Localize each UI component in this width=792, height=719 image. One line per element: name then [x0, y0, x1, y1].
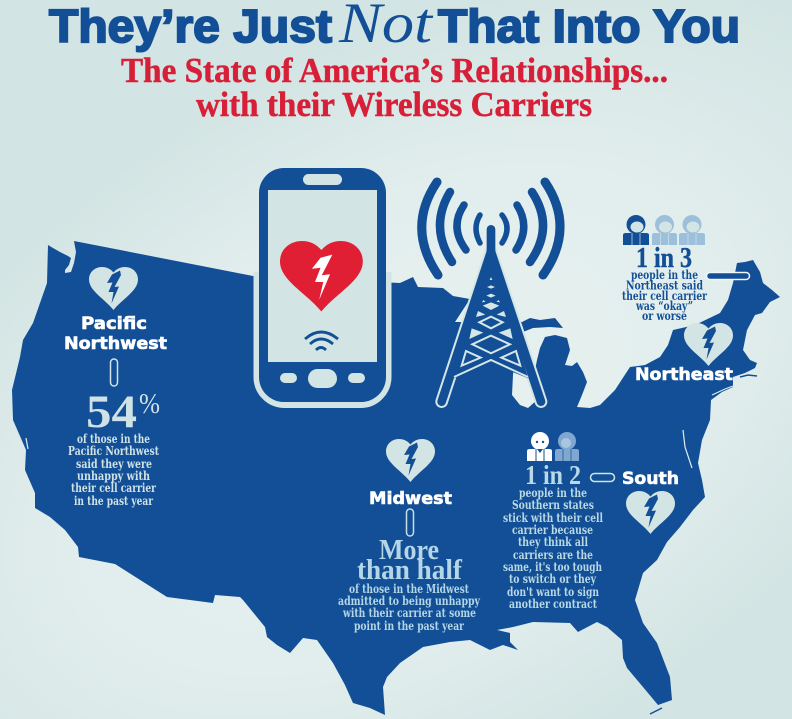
- description: with their carrier at some: [342, 605, 476, 620]
- subtitle: with their Wireless Carriers: [196, 85, 592, 124]
- icon: broken heart: [626, 491, 675, 534]
- description: don't want to sign: [507, 584, 599, 599]
- statistic 1 in 2: 1 in 2: [525, 460, 581, 490]
- icon: signal waves: [422, 182, 560, 275]
- phone buttons: [280, 369, 365, 388]
- panel: Northeast: [622, 215, 750, 384]
- description: another contract: [509, 596, 597, 611]
- icon: person muted: [555, 432, 579, 461]
- description: [68, 431, 159, 508]
- description: carriers are the: [513, 547, 593, 562]
- statistic 54%: 54: [86, 386, 137, 438]
- description: unhappy with: [77, 468, 150, 483]
- phone speaker: [303, 174, 342, 185]
- phone screen: [268, 190, 377, 362]
- connector: [706, 272, 750, 280]
- subtitle: The State of America’s Relationships...: [121, 51, 668, 90]
- description: their cell carrier: [622, 289, 708, 303]
- description: or worse: [642, 309, 687, 323]
- region label: [64, 314, 167, 353]
- icon: smartphone: [256, 165, 388, 405]
- description: Northeast said: [626, 278, 703, 292]
- description: Southern states: [512, 497, 594, 512]
- icon: person highlighted: [623, 215, 649, 245]
- description: in the past year: [74, 493, 153, 508]
- region label: Pacific: [81, 314, 147, 333]
- icon: person highlighted: [527, 432, 552, 461]
- description: they think all: [518, 534, 588, 549]
- description: said they were: [76, 456, 152, 471]
- statistic more than half: More: [379, 535, 439, 566]
- statistic 54%: [86, 386, 160, 438]
- icon: person muted: [652, 215, 677, 245]
- title: They’re Just: [49, 0, 332, 52]
- description: [622, 268, 708, 323]
- region label: South: [622, 469, 679, 488]
- panel: Midwest: [338, 439, 481, 633]
- icon: antenna tower: [442, 225, 541, 402]
- connector: [406, 509, 414, 536]
- region label: Northeast: [635, 365, 733, 384]
- description: to switch or they: [509, 571, 597, 586]
- description: people in the: [519, 485, 587, 500]
- description: Pacific Northwest: [68, 443, 159, 458]
- panel: South: [503, 432, 679, 611]
- icon: person muted: [679, 215, 705, 245]
- description: [503, 485, 603, 611]
- title: That Into You: [438, 0, 740, 52]
- statistic 1 in 3: 1 in 3: [636, 243, 692, 274]
- icon: broken heart: [684, 323, 733, 366]
- description: people in the: [631, 268, 698, 282]
- icon: broken heart: [386, 439, 435, 482]
- icon: broken heart: [89, 267, 138, 310]
- icon: red broken heart: [280, 241, 363, 312]
- description: same, it's too tough: [503, 559, 602, 574]
- region label: Midwest: [369, 489, 452, 508]
- panel: Pacific Northwest: [64, 267, 167, 508]
- description: of those in the: [77, 431, 150, 446]
- icon: wifi: [305, 332, 338, 350]
- statistic 54%: %: [139, 389, 160, 420]
- description: admitted to being unhappy: [338, 593, 481, 608]
- statistic more than half: [357, 535, 463, 586]
- description: their cell carrier: [71, 480, 156, 495]
- title: [49, 0, 740, 55]
- region label: Northwest: [64, 334, 167, 353]
- description: [338, 581, 481, 633]
- description: was “okay”: [635, 299, 693, 313]
- map of the United States: [12, 241, 780, 715]
- description: of those in the Midwest: [349, 581, 469, 596]
- subtitle: [121, 51, 668, 124]
- connector: [590, 474, 614, 482]
- description: carrier because: [512, 522, 593, 537]
- connector: [110, 359, 118, 386]
- description: stick with their cell: [503, 510, 603, 525]
- description: point in the past year: [354, 618, 464, 633]
- statistic more than half: than half: [357, 555, 463, 586]
